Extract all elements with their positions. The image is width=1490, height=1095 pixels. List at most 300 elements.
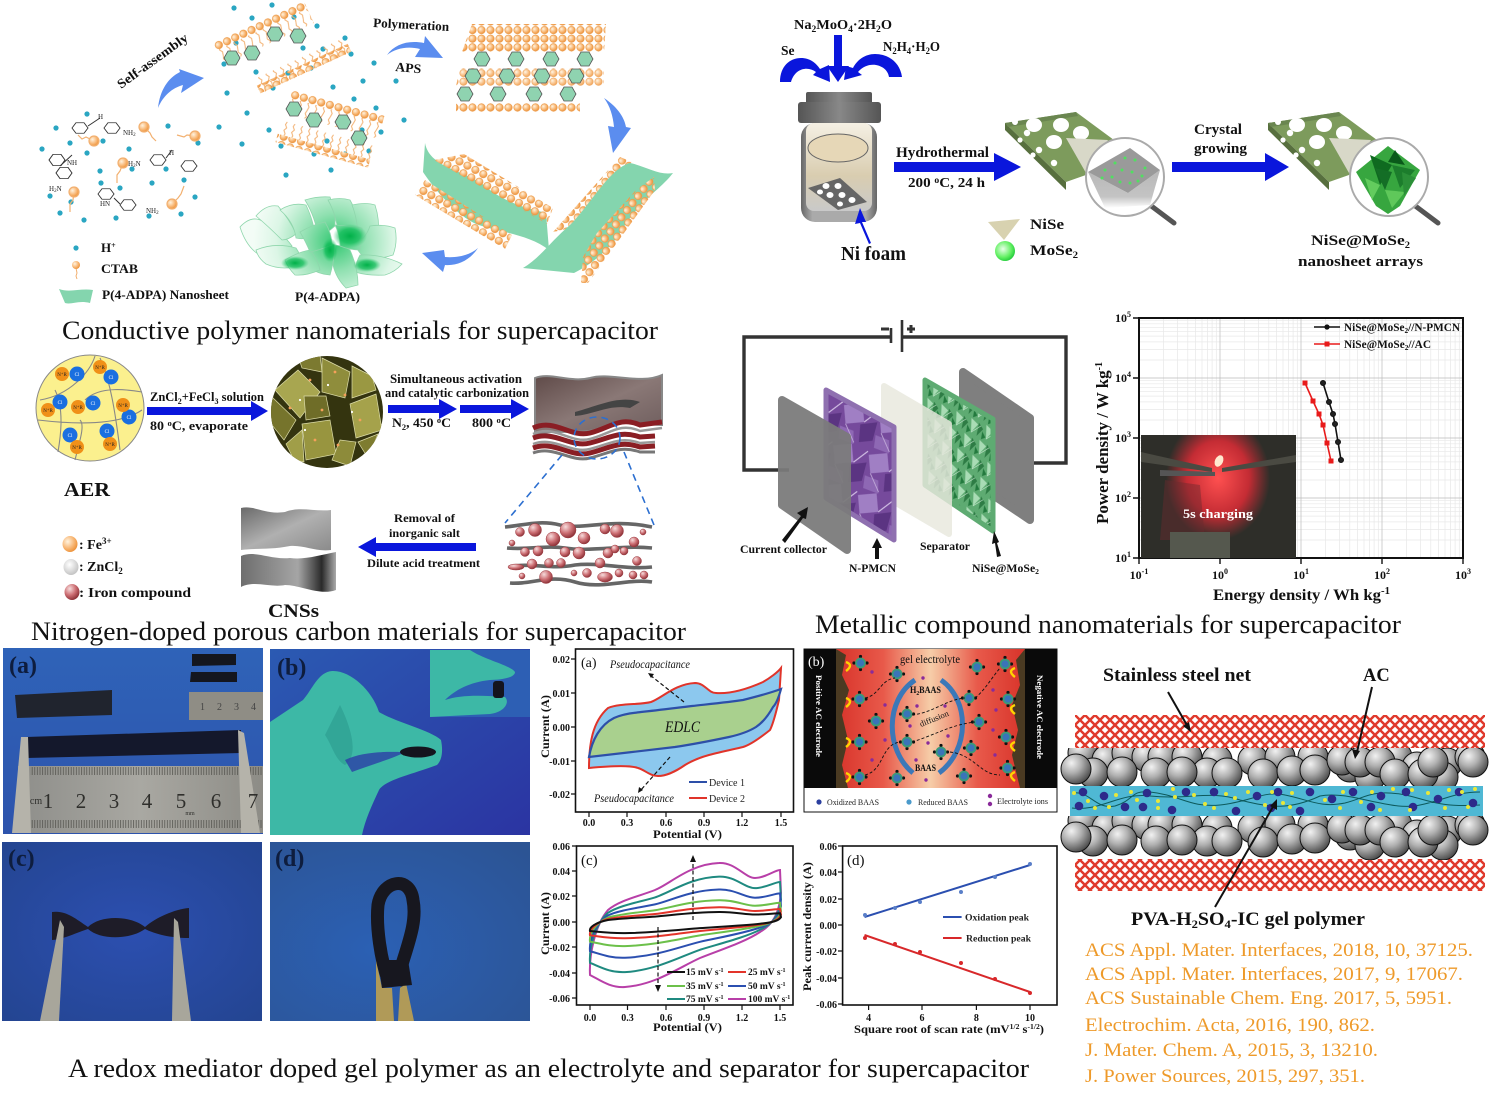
label: Hydrothermal: Hydrothermal <box>896 145 989 161</box>
legend: ZnCl2 <box>64 559 123 576</box>
x labels <box>583 818 787 829</box>
label: precursor: 2 <box>812 24 817 34</box>
label: N2 temperature: 2 <box>402 423 406 432</box>
x tick labels: 3 <box>1467 567 1471 576</box>
molecule atom labels: H <box>98 113 103 121</box>
label: N2 temperature: N <box>392 415 401 430</box>
scan rate legend: -1 <box>781 968 786 974</box>
references list <box>1085 940 1473 1087</box>
label: 800 C: C <box>501 415 511 430</box>
label: precursor: ·2H <box>853 17 877 32</box>
annotations: EDLC <box>664 719 700 736</box>
AER resin particle: N⁺R <box>72 445 82 451</box>
plot frame and ticks <box>1133 318 1463 564</box>
legend: Fe3+: : Fe <box>79 538 102 553</box>
x labels: 6 <box>920 1013 924 1024</box>
arrow: to gel polymer <box>1215 799 1277 907</box>
x tick labels: 0 <box>1224 567 1228 576</box>
label: evaporate: o <box>167 419 172 428</box>
arrow: self-assembly <box>158 69 204 108</box>
axis titles: Current (A) <box>538 892 552 955</box>
x tick labels: 2 <box>1386 567 1390 576</box>
impregnated resin sphere <box>268 355 384 469</box>
AER resin particle <box>36 355 144 461</box>
caption: redox gel polymer: A redox mediator doped gel polymer as an electrolyte and separator for supercapacitor <box>68 1054 1029 1083</box>
y labels: -0.04 <box>549 969 570 980</box>
y tick labels: 10 <box>1115 491 1127 505</box>
label: activation <box>385 372 529 400</box>
arrow: impregnation <box>147 401 268 421</box>
label: temperature: C, 24 h <box>939 176 985 191</box>
y tick labels <box>1115 310 1131 565</box>
diagram legend: Electrolyte ions <box>997 796 1048 806</box>
curves <box>590 863 781 987</box>
y labels: 0.00 <box>552 723 570 734</box>
annotations <box>581 656 700 805</box>
legend: NiSe label: NiSe <box>1030 217 1065 233</box>
molecule atom labels: H <box>128 160 133 168</box>
legend: H+: H <box>101 240 111 255</box>
series: red <box>1302 380 1334 464</box>
label a: (a) <box>9 653 37 679</box>
AER resin particle: Cl <box>75 373 80 378</box>
axis titles: Potential (V) <box>653 827 722 841</box>
AER resin particle: N⁺R <box>105 442 115 448</box>
steel net top <box>1075 715 1485 748</box>
panel: asymmetric device schematic <box>740 320 1066 576</box>
chart: Ragone plot <box>1093 310 1471 604</box>
x axis title: Square root of scan rate (mV <box>854 1024 996 1036</box>
steel net bottom <box>1075 859 1485 891</box>
label: temperature: o <box>934 175 940 185</box>
y tick labels: 3 <box>1127 430 1131 439</box>
label: gel polymer: 4 <box>1225 917 1231 931</box>
y labels: -0.02 <box>816 947 837 958</box>
AER resin particle: N⁺R <box>57 372 67 378</box>
reduction line <box>864 935 1030 993</box>
label: Crystal growing: Crystal <box>1194 122 1242 138</box>
y labels: 0.02 <box>552 892 570 903</box>
caption: conductive polymer: Conductive polymer nanomaterials for supercapacitor <box>62 316 658 345</box>
label: precursor: O <box>881 17 892 32</box>
micelle bilayer upper <box>213 0 351 103</box>
AER resin particle: Cl <box>58 401 63 406</box>
arrow: precursor addition <box>827 35 849 82</box>
diagram legend <box>816 794 1048 807</box>
label: removal step: Removal of <box>394 511 456 525</box>
x tick labels: 10 <box>1130 568 1142 582</box>
legend: NiSe icon <box>988 219 1020 240</box>
arrow: hydrazine addition <box>844 54 902 80</box>
label: hydrazine: 2 <box>926 46 930 56</box>
red area <box>589 668 781 776</box>
label: precursor: 2 <box>876 24 881 34</box>
y labels: -0.06 <box>549 994 570 1005</box>
label: gel polymer: SO <box>1198 909 1225 930</box>
x tick labels: 10 <box>1374 568 1386 582</box>
scan rate legend: -1 <box>719 995 724 1001</box>
references list: J. Power Sources, 2015, 297, 351. <box>1085 1066 1365 1087</box>
zoom outline dashed <box>505 417 654 525</box>
label: hydrazine: O <box>930 39 940 54</box>
y labels <box>549 655 570 801</box>
legend: Fe3+ <box>62 536 112 553</box>
label: activation: Simultaneous activation <box>390 372 522 386</box>
y labels: 0.00 <box>820 921 837 932</box>
annotations: Pseudocapacitance <box>593 793 674 805</box>
arrow: leftward curve <box>422 248 478 272</box>
AER resin particle: N⁺R <box>43 408 53 414</box>
x axis title: ) <box>1040 1024 1044 1036</box>
chart legend: //N-PMCN <box>1407 322 1461 334</box>
x labels: 1.5 <box>775 818 787 829</box>
chart c: CV at scan rates <box>538 842 793 1034</box>
circulating arrows <box>892 680 963 773</box>
y tick labels: 2 <box>1127 490 1131 499</box>
reaction jar <box>798 92 881 222</box>
scan rate legend: -1 <box>719 982 724 988</box>
APS label: APS <box>395 59 422 76</box>
label: gel polymer: PVA-H <box>1131 909 1189 930</box>
scan rate legend: 25 mV s <box>748 968 781 978</box>
references list: J. Mater. Chem. A, 2015, 3, 13210. <box>1085 1040 1378 1061</box>
label: CNSs: CNSs <box>268 601 319 622</box>
right nanosheet with surfactant <box>523 157 673 283</box>
y labels: 0.06 <box>820 842 837 853</box>
arrow: carbonization <box>460 399 529 419</box>
label: N-PMCN: N-PMCN <box>849 563 897 575</box>
scan rate legend: -1 <box>785 995 790 1001</box>
frame and ticks <box>838 846 1057 1010</box>
AER resin particle: N⁺R <box>118 403 128 409</box>
chart legend: NiSe@MoSe <box>1344 322 1406 334</box>
label: stainless steel net: Stainless steel net <box>1103 666 1252 686</box>
y axis title: Power density / W kg <box>1093 370 1112 524</box>
label: N2 temperature: o <box>437 416 441 425</box>
x tick labels: 1 <box>1305 567 1309 576</box>
y tick labels: 4 <box>1127 370 1131 379</box>
scan rate legend: 100 mV s <box>748 995 785 1005</box>
ruler digits: cm <box>30 796 42 807</box>
label: solution: solution <box>219 390 264 404</box>
label: removal step <box>389 511 460 540</box>
chart legend: 2 <box>1405 343 1409 352</box>
x axis title: -1/2 <box>1027 1023 1040 1031</box>
legend: Reduction peak <box>966 934 1032 944</box>
label: hydrazine: N <box>883 39 893 54</box>
arrow: NiSe@MoSe2 <box>992 531 1001 557</box>
CNSs nanosheet images <box>241 507 336 592</box>
legend: ZnCl2: 2 <box>118 566 123 576</box>
label: Ni foam: Ni foam <box>841 243 906 265</box>
ruler digits: 2 <box>76 789 86 813</box>
label: product: 2 <box>1405 240 1411 250</box>
photo d: folded gel loop <box>270 842 530 1021</box>
label: evaporate: C, evaporate <box>172 418 248 433</box>
label: N2 temperature: C <box>441 415 451 430</box>
label: Crystal growing <box>1194 122 1248 157</box>
y labels: 0.04 <box>552 867 570 878</box>
y labels: 0.06 <box>552 842 570 853</box>
molecule atom labels: NH <box>123 129 133 137</box>
y tick labels: 10 <box>1115 371 1127 385</box>
legend: Device 2 <box>709 793 745 805</box>
label: hydrazine: ·H <box>911 39 926 54</box>
AER resin particle: Cl <box>91 402 96 407</box>
layered carbon sheet <box>533 375 662 459</box>
blue area <box>589 689 781 757</box>
label: solution: +FeCl <box>182 390 215 404</box>
caption: metallic compound: Metallic compound nanomaterials for supercapacitor <box>815 610 1401 639</box>
AER resin particle: Cl <box>127 416 132 421</box>
x labels <box>584 1013 786 1024</box>
label c: (c) <box>581 853 598 869</box>
label b: (b) <box>808 655 825 670</box>
scan rate legend: 50 mV s <box>748 982 781 992</box>
free monomer molecules <box>49 118 197 210</box>
y labels: 0.01 <box>552 689 570 700</box>
magnifier with seeds <box>1086 138 1174 223</box>
label b: (b) <box>277 655 306 681</box>
references list: Electrochim. Acta, 2016, 190, 862. <box>1085 1015 1375 1036</box>
diagram legend: Reduced BAAS <box>918 797 968 807</box>
x axis title: Energy density / Wh kg <box>1213 587 1369 604</box>
legend: CTAB: CTAB <box>101 261 138 276</box>
plate: right current collector <box>963 372 1030 520</box>
y tick labels: 5 <box>1127 310 1131 319</box>
arrow: acid treatment <box>358 537 476 557</box>
y labels: 0.04 <box>820 868 837 879</box>
y tick labels: 10 <box>1115 551 1127 565</box>
inset photo: LED lit after charging <box>1141 435 1296 558</box>
label: AER: AER <box>64 479 111 501</box>
y labels <box>549 842 570 1005</box>
y labels: 0.00 <box>552 918 570 929</box>
label: solution: 2 <box>178 397 182 406</box>
micelle bilayer lower <box>275 89 385 168</box>
arrow: crystal growing <box>1172 153 1289 181</box>
series: black <box>1320 380 1344 462</box>
ruler digits: 7 <box>248 789 258 813</box>
diffusion paths <box>865 668 1000 775</box>
molecule atom labels <box>49 113 174 216</box>
H2BAAS label: H <box>910 686 917 696</box>
axis titles <box>538 695 722 841</box>
label: hydrazine: 4 <box>907 46 912 56</box>
label: 800 C: 800 <box>472 415 492 430</box>
polymeration label: Polymeration <box>373 15 450 34</box>
legend: MoSe2 label: MoSe <box>1030 243 1065 259</box>
plate: separator <box>884 386 949 534</box>
label: separator: Separator <box>920 541 970 553</box>
x labels: 0.3 <box>621 818 633 829</box>
axis titles: Current (A) <box>538 695 552 758</box>
self-assembly label: Self-assembly <box>114 30 191 91</box>
scan rate legend <box>667 968 790 1005</box>
dashed arrows <box>640 675 684 791</box>
y tick labels: 1 <box>1127 550 1131 559</box>
axis titles <box>538 892 722 1034</box>
negative electrode label: Negative AC electrode <box>1035 675 1045 759</box>
scan rate legend: 35 mV s <box>686 982 719 992</box>
photo a: stretched gel with ruler <box>3 648 263 834</box>
label: temperature: 200 <box>908 176 929 191</box>
legend: nanosheet label: P(4-ADPA) Nanosheet <box>102 288 230 302</box>
x tick labels <box>1130 567 1471 582</box>
activated carbon layer bottom <box>1060 816 1488 860</box>
x labels: 1.2 <box>736 818 748 829</box>
label: product: NiSe@MoSe <box>1311 233 1392 249</box>
ruler digits: 4 <box>142 789 153 813</box>
legend: CTAB icon <box>72 261 80 279</box>
circuit wires and battery <box>744 320 1066 470</box>
molecule atom labels: 2 <box>133 164 136 169</box>
y labels: 0.02 <box>552 655 570 666</box>
caption: nitrogen-doped carbon: Nitrogen-doped porous carbon materials for supercapacitor <box>31 617 686 646</box>
x tick labels: -1 <box>1142 567 1148 576</box>
molecule atom labels: 2 <box>54 189 57 194</box>
chart d: peak current vs scan rate <box>800 842 1057 1036</box>
legend: MoSe2 label: 2 <box>1073 250 1079 260</box>
molecule atom labels: N <box>57 185 62 193</box>
activated carbon layer top <box>1060 748 1488 786</box>
lamellar polymer block <box>456 24 606 112</box>
panel: hydrothermal synthesis <box>780 17 1438 270</box>
AER resin particle: N⁺R <box>73 405 83 411</box>
x labels: 0.6 <box>660 818 672 829</box>
left nanosheet with surfactant <box>415 143 553 250</box>
label: product <box>1298 233 1423 270</box>
label: Se: Se <box>781 43 795 58</box>
y labels: -0.02 <box>549 790 570 801</box>
y axis title: -1 <box>1094 362 1105 370</box>
photo b: bent gel held by glove <box>270 649 530 835</box>
P(4-ADPA) flower nanostructure <box>240 197 402 288</box>
y labels: 0.02 <box>820 895 837 906</box>
x axis title: -1 <box>1381 586 1390 597</box>
arrow: N-PMCN <box>872 538 882 559</box>
arrow: current collector <box>782 507 808 543</box>
y tick labels: 10 <box>1115 311 1127 325</box>
H2BAAS label: 2 <box>916 690 919 697</box>
label: N2 temperature: , 450 <box>406 415 437 430</box>
axis titles: Potential (V) <box>653 1020 722 1034</box>
arrow: downward curve <box>604 98 631 153</box>
label: precursor: Na <box>794 17 810 32</box>
x labels: 0.6 <box>660 1013 672 1024</box>
molecule atom labels: NH <box>146 207 156 215</box>
frame and ticks <box>572 846 793 1010</box>
label: solution: 3 <box>215 397 219 406</box>
label: 800 C: o <box>497 416 501 425</box>
label: dilute acid: Dilute acid treatment <box>367 556 480 570</box>
ruler digits: 6 <box>211 789 221 813</box>
label d: (d) <box>275 846 304 872</box>
legend: ZnCl2: : ZnCl <box>79 560 118 575</box>
molecule atom labels: HN <box>100 200 110 208</box>
BAAS label: BAAS <box>915 764 936 774</box>
references list: ACS Sustainable Chem. Eng. 2017, 5, 5951. <box>1085 988 1452 1009</box>
arrow: activation <box>388 399 457 419</box>
inset photo <box>430 650 530 717</box>
legend <box>943 914 1032 944</box>
foam plate left <box>1005 112 1137 190</box>
molecules <box>851 655 1016 786</box>
arrow: Ni foam pointer <box>855 208 871 244</box>
x labels: 1.5 <box>774 1013 786 1024</box>
scan rate legend: -1 <box>781 982 786 988</box>
arrow: hydrothermal <box>894 153 1021 181</box>
molecule atom labels: H <box>49 185 54 193</box>
x tick labels: 10 <box>1455 568 1467 582</box>
magnifier with nanosheets <box>1350 138 1438 223</box>
legend: iron compound: : Iron compound <box>79 586 191 601</box>
x labels: 0.3 <box>621 1013 634 1024</box>
label: NiSe@MoSe2: NiSe@MoSe <box>972 563 1034 575</box>
CTAB surfactant molecules <box>69 122 200 212</box>
electrode rough edges <box>836 649 1025 788</box>
ruler digits: 5 <box>176 789 186 813</box>
legend: MoSe2 icon <box>995 241 1015 261</box>
x labels: 0.0 <box>583 818 595 829</box>
ruler digits: 3 <box>109 789 119 813</box>
small ruler digits: 1 2 3 4 <box>200 702 256 713</box>
AER resin particle: Cl <box>68 434 73 439</box>
label: Crystal growing: growing <box>1194 141 1248 157</box>
label: current collector: Current collector <box>740 544 827 556</box>
ruler digits: 1 <box>43 789 53 813</box>
chart a: CV of two devices <box>538 649 794 841</box>
chart legend <box>1314 322 1461 352</box>
annotations: Pseudocapacitance <box>609 659 690 671</box>
molecule atom labels: 2 <box>156 211 159 216</box>
y labels <box>816 842 837 1011</box>
legend <box>689 777 745 805</box>
panel: device layer schematic <box>1061 666 1488 931</box>
x axis title: s <box>1019 1024 1028 1036</box>
arrow: to AC <box>1352 687 1372 759</box>
y labels: -0.06 <box>816 1000 837 1011</box>
x labels: 0.9 <box>698 818 710 829</box>
scan rate legend: 75 mV s <box>686 995 719 1005</box>
label: product: nanosheet arrays <box>1298 254 1423 270</box>
x labels: 8 <box>974 1013 979 1024</box>
hydrogen ions scattered dots <box>42 5 404 248</box>
AER resin particle: Cl <box>109 376 114 381</box>
label: NiSe@MoSe2: 2 <box>1035 567 1039 576</box>
iron compounds between carbon layers <box>505 522 652 585</box>
ruler digits <box>30 789 258 817</box>
plate: left current collector <box>782 400 847 550</box>
x labels: 0.9 <box>698 1013 710 1024</box>
scan rate legend: -1 <box>719 968 724 974</box>
y axis title: Peak current density (A) <box>800 862 814 991</box>
gel electrolyte label: gel electrolyte <box>900 652 960 666</box>
x labels: 1.2 <box>736 1013 748 1024</box>
grid lines <box>1139 318 1463 558</box>
molecule atom labels: 2 <box>133 133 136 138</box>
diagram b: gel electrolyte mechanism <box>804 649 1057 812</box>
x axis title: 1/2 <box>1010 1023 1020 1031</box>
label: removal step: inorganic salt <box>389 526 460 540</box>
legend: Oxidation peak <box>965 914 1030 924</box>
yellow ions at electrodes <box>846 662 1015 782</box>
legend: nanosheet icon <box>59 289 93 303</box>
x tick labels: 10 <box>1212 568 1224 582</box>
molecule atom labels: N <box>136 160 141 168</box>
references list: ACS Appl. Mater. Interfaces, 2018, 10, 37125. <box>1085 940 1473 961</box>
gel polymer layer <box>1070 786 1483 816</box>
